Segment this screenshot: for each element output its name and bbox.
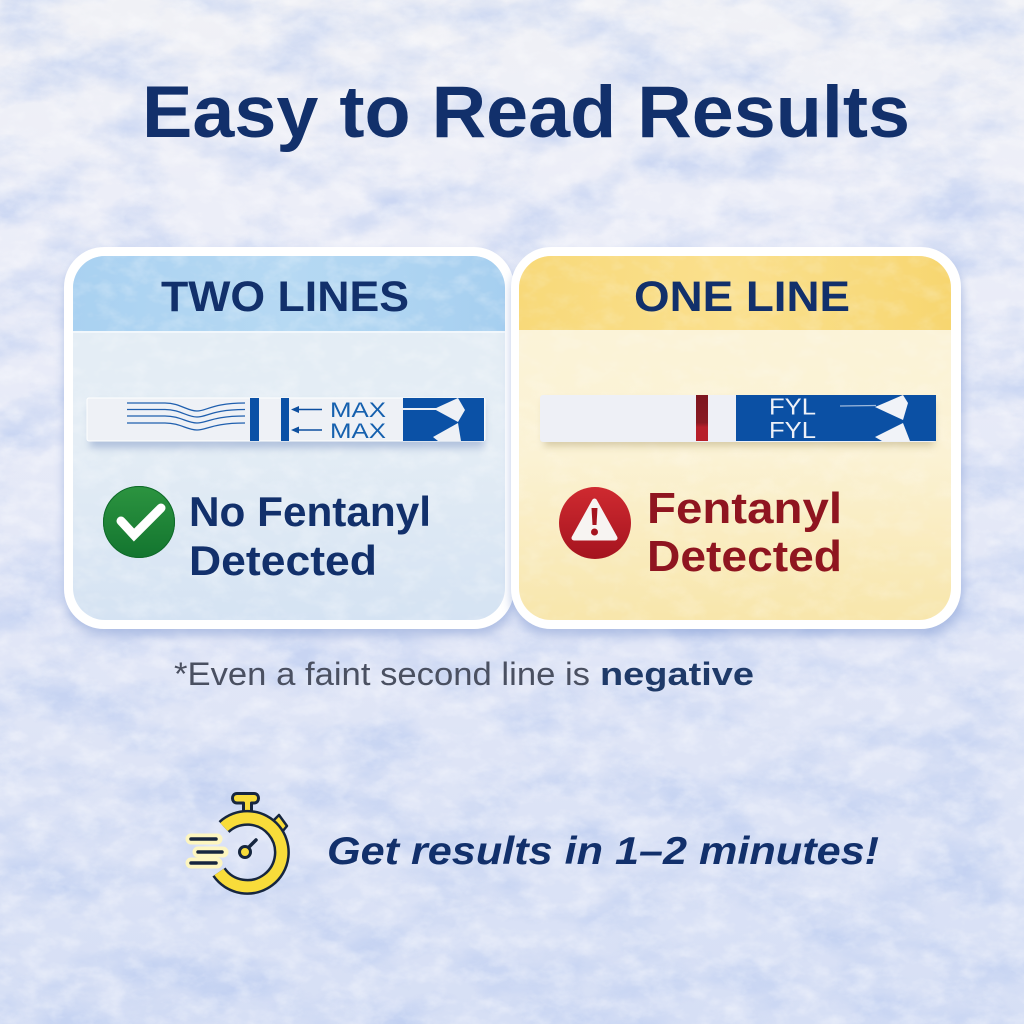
- side button: [272, 815, 287, 832]
- arrows: [291, 406, 322, 434]
- panel: two lines: [64, 247, 516, 636]
- footnote: *Even a faint second line is: [174, 656, 590, 692]
- panel header: two lines: [73, 256, 505, 620]
- icon: red warning: [559, 487, 631, 559]
- panel header: one line: ONE LINE: [634, 273, 850, 321]
- panel header: two lines: TWO LINES: [161, 273, 409, 321]
- panel: one line: [511, 247, 963, 636]
- panel header: one line: [519, 256, 951, 620]
- test strip: one line: [540, 394, 936, 446]
- test strip: two lines: [87, 398, 485, 448]
- result text: fentanyl detected: [647, 484, 842, 581]
- strip handle: [403, 398, 484, 441]
- test strip: one line: FYL: [769, 417, 816, 443]
- result text: fentanyl detected: Detected: [647, 532, 842, 581]
- title: Easy to Read Results: [142, 72, 910, 153]
- callout: results time: Get results in 1–2 minutes!: [327, 830, 879, 873]
- icon: green check: [103, 486, 175, 558]
- result text: no fentanyl detected: [189, 488, 431, 584]
- result text: no fentanyl detected: Detected: [189, 537, 377, 584]
- result text: no fentanyl detected: No Fentanyl: [189, 488, 431, 535]
- strip handle: [736, 395, 936, 441]
- test line: red: [696, 395, 708, 441]
- icon: stopwatch: [191, 794, 287, 887]
- dial and hand: [247, 840, 256, 849]
- control and test lines: [250, 398, 259, 441]
- footnote: negative: [600, 656, 754, 692]
- footnote: [174, 656, 754, 692]
- test strip: two lines: MAX: [330, 420, 386, 443]
- strip text: FYL: FYL: [769, 394, 816, 420]
- wavy lines: [127, 403, 245, 430]
- speed lines: [191, 839, 223, 863]
- strip text: MAX: MAX: [330, 399, 386, 422]
- result text: fentanyl detected: Fentanyl: [647, 484, 842, 533]
- crown: [232, 794, 258, 815]
- ring: [219, 818, 282, 887]
